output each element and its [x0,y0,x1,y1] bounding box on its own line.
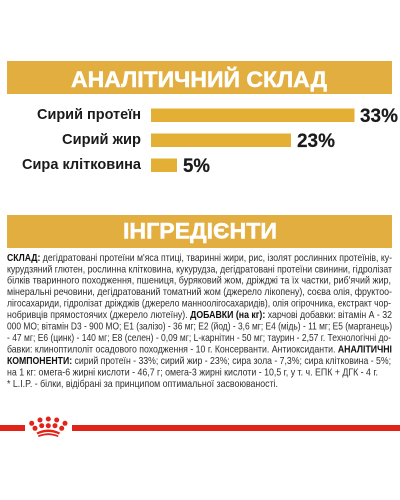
bar row: crude protein: Сирий протеїн [37,106,141,123]
text block: ingredients list: * L.I.P. - білки, відібрані за принципом оптимальної засвоюваності. [7,378,278,390]
bar row: crude fibre: 5% [183,155,210,177]
footer rule left [0,425,25,431]
bar row: crude fat: 23% [297,130,335,152]
bar row: crude protein: 33% [360,105,398,127]
icon: red crown logo [29,416,68,437]
footer rule right [72,425,400,431]
heading: analytical composition: АНАЛІТИЧНИЙ СКЛАД [71,67,327,92]
text block: ingredients list: бавки: клиноптилоліт осадового походження - 10 г. Консерванти. Антиоксиданти. АНАЛІТИЧНІ [7,343,392,355]
bar row: crude fat [62,130,335,152]
heading: ingredients [7,215,392,248]
heading: analytical composition [7,61,392,94]
heading: ingredients: ІНГРЕДІЄНТИ [123,218,277,244]
bar row: crude fat: Сирий жир [62,131,141,148]
bar row: crude fibre: Сира клітковина [22,156,142,173]
bar row: crude protein [37,105,398,127]
text block: ingredients list [7,253,392,390]
bar chart: composition [22,105,398,177]
bar row: crude fibre [22,155,210,177]
